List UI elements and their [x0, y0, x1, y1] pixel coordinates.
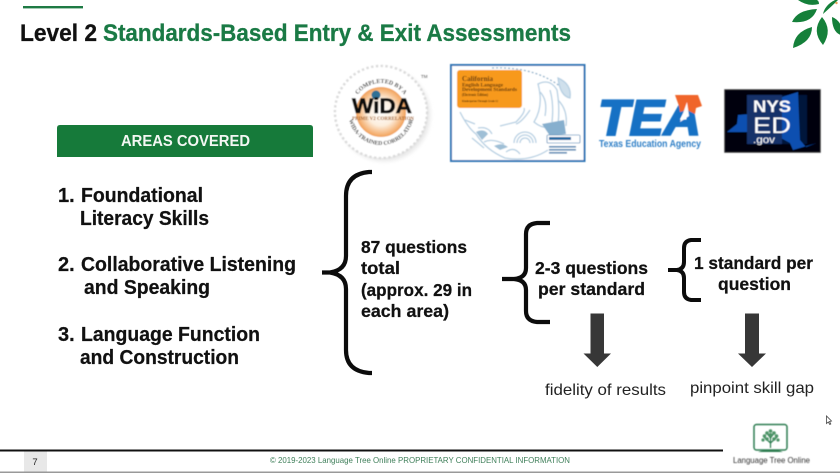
heading: areas covered: AREAS COVERED [121, 133, 250, 150]
text block: question total: (approx. 29 in [361, 280, 472, 300]
text block: standard per question: question [718, 274, 791, 294]
logo: WIDA badge: WIDA-TRAINED CORRELATOR [349, 118, 414, 146]
icon: mouse cursor [826, 416, 832, 424]
footer copyright: © 2019-2023 Language Tree Online PROPRIETARY CONFIDENTIAL INFORMATION [270, 455, 570, 465]
logo: WIDA badge [334, 64, 431, 162]
logo: WIDA badge: PRIME V2 CORRELATION [352, 116, 414, 122]
orange title panel: (Electronic Edition) [462, 92, 489, 97]
text block: areas list: 1. [58, 185, 75, 207]
logo: Language Tree Online [733, 424, 811, 465]
text block: question total [361, 237, 472, 321]
map line art [460, 68, 570, 159]
logo: Texas Education Agency: TEA [598, 90, 701, 146]
bracket: large brace [322, 172, 372, 373]
logo: WIDA badge: TM [421, 74, 428, 79]
text block: areas list: and Speaking [84, 277, 210, 299]
orange title panel: California [462, 74, 493, 83]
label: pinpoint skill gap: pinpoint skill gap [690, 380, 814, 397]
text block: question total: 87 questions [361, 237, 467, 257]
text block: standard per question: 1 standard per [694, 253, 813, 273]
logo: NYSED: ED [753, 113, 791, 138]
logo: Language Tree Online: Language Tree Online [733, 456, 811, 465]
title: Standards-Based Entry & Exit Assessments [103, 20, 571, 47]
icon: corner leaves [792, 0, 840, 48]
text block: areas list: 2. [58, 254, 75, 276]
text block: areas list: Foundational [81, 185, 203, 207]
orange title panel: Development Standards [462, 88, 517, 93]
logo: WIDA badge: COMPLETED BY A [355, 78, 407, 95]
logo: WIDA badge: WiDA [352, 95, 412, 118]
arrow: to pinpoint skill gap [738, 314, 766, 367]
text block: areas list: Literacy Skills [80, 208, 209, 230]
text block: areas list [58, 185, 296, 369]
logo: NYSED [724, 90, 820, 152]
text block: question total: each area) [361, 301, 449, 321]
text block: standard per question [694, 253, 813, 294]
bracket: medium brace [502, 223, 550, 322]
text block: questions per standard: per standard [538, 279, 645, 299]
text block: areas list: Language Function [81, 324, 260, 346]
page number [24, 452, 47, 472]
title: Level 2 [20, 20, 97, 47]
heading: areas covered [57, 125, 313, 157]
orange title panel: Kindergarten Through Grade 12 [462, 99, 498, 103]
title accent line [23, 6, 83, 8]
label: fidelity of results: fidelity of results [545, 382, 666, 399]
logo: NYSED: .gov [753, 134, 776, 146]
orange title panel: English Language [462, 84, 504, 88]
page number: 7 [32, 457, 38, 468]
arrow: to fidelity of results [584, 314, 611, 367]
text block: areas list: 3. [58, 324, 75, 346]
logo: NYSED: NYS [753, 98, 791, 116]
text block: areas list: Collaborative Listening [81, 254, 296, 276]
text block: questions per standard: 2-3 questions [535, 258, 648, 278]
logo: Texas Education Agency: Texas Education Agency [599, 139, 701, 150]
text block: areas list: and Construction [80, 347, 239, 369]
text block: questions per standard [535, 258, 648, 299]
text block: question total: total [361, 258, 400, 278]
bracket: small brace [668, 240, 701, 300]
logo: California standards cover [451, 65, 584, 161]
orange title panel [457, 70, 522, 108]
footer rule [0, 450, 723, 452]
